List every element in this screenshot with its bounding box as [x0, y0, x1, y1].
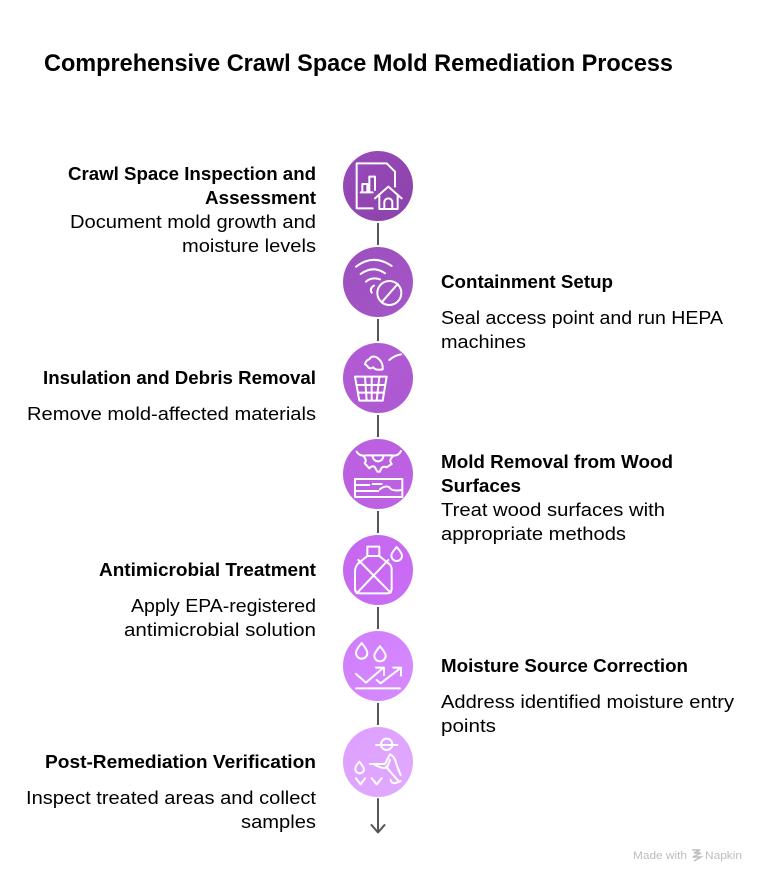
icon: water drops and upward check arrows	[343, 631, 413, 701]
watermark: made with napkin: Napkin	[705, 850, 742, 862]
text block: crawl space inspection	[68, 164, 316, 256]
icon: crossed-out bottle and drop	[343, 535, 413, 605]
text block: mold removal from wood: appropriate methods	[441, 524, 626, 544]
text block: post-remediation verification: Inspect treated areas and collect	[26, 788, 316, 808]
text block: insulation and debris removal: Insulation and Debris Removal	[43, 368, 316, 388]
connector 5	[377, 607, 379, 629]
connector 6	[377, 703, 379, 725]
arrow: end of process	[372, 799, 384, 832]
text block: mold removal from wood: Surfaces	[441, 476, 521, 496]
text block: crawl space inspection: Document mold growth and	[70, 212, 316, 232]
text block: antimicrobial treatment: antimicrobial solution	[124, 620, 316, 640]
text block: containment setup	[441, 272, 723, 352]
text block: mold removal from wood: Treat wood surfaces with	[441, 500, 665, 520]
icon: debris and waste basket	[343, 343, 413, 413]
icon: blocked airflow signal	[343, 247, 413, 317]
text block: containment setup: Containment Setup	[441, 272, 613, 292]
icon: mold on wood plank	[343, 439, 413, 509]
text block: containment setup: machines	[441, 332, 526, 352]
text block: moisture source correction	[441, 656, 734, 736]
text block: antimicrobial treatment: Antimicrobial Treatment	[99, 560, 316, 580]
text block: moisture source correction: Address identified moisture entry	[441, 692, 734, 712]
connector 3	[377, 415, 379, 437]
text block: moisture source correction: Moisture Source Correction	[441, 656, 688, 676]
text block: containment setup: Seal access point and run HEPA	[441, 308, 723, 328]
text block: insulation and debris removal	[27, 368, 316, 424]
connector 4	[377, 511, 379, 533]
text block: crawl space inspection: Assessment	[205, 188, 316, 208]
text block: mold removal from wood	[441, 452, 673, 544]
text block: insulation and debris removal: Remove mold-affected materials	[27, 404, 316, 424]
text block: post-remediation verification: Post-Remediation Verification	[45, 752, 316, 772]
text block: moisture source correction: points	[441, 716, 496, 736]
text block: antimicrobial treatment: Apply EPA-registered	[131, 596, 316, 616]
text block: crawl space inspection: moisture levels	[182, 236, 316, 256]
watermark: made with napkin: Made with	[633, 850, 687, 862]
icon: inspector kneeling by samples	[343, 727, 413, 797]
text block: mold removal from wood: Mold Removal from Wood	[441, 452, 673, 472]
text block: post-remediation verification: samples	[241, 812, 316, 832]
connector 2	[377, 319, 379, 341]
watermark: made with napkin	[633, 850, 742, 862]
text block: antimicrobial treatment	[99, 560, 316, 640]
title: Comprehensive Crawl Space Mold Remediation Process	[44, 50, 673, 77]
text block: crawl space inspection: Crawl Space Inspection and	[68, 164, 316, 184]
connector 1	[377, 223, 379, 245]
text block: post-remediation verification	[26, 752, 316, 832]
icon: document with chart and house	[343, 151, 413, 221]
